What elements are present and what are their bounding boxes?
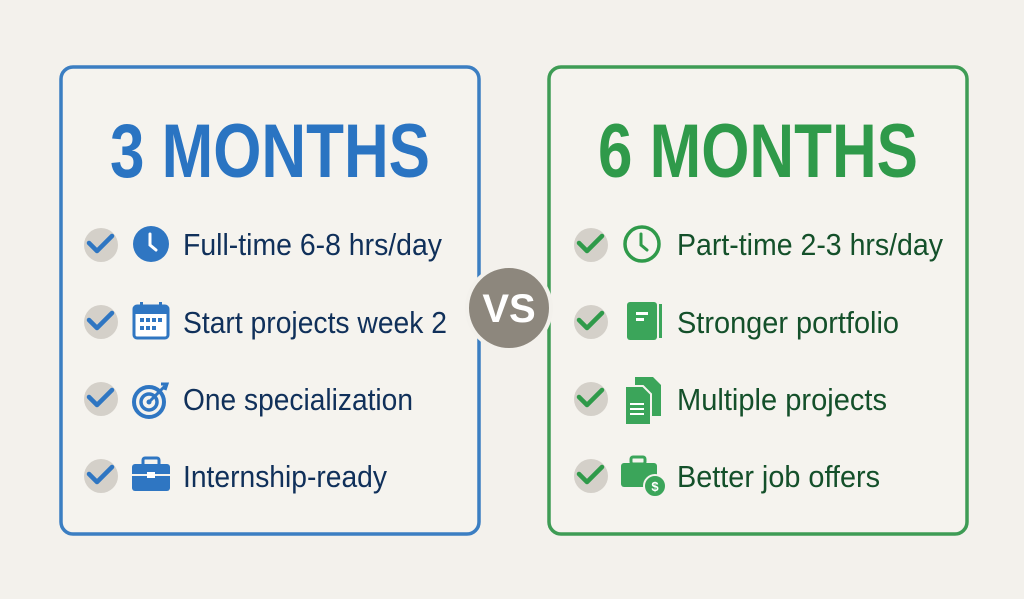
item: specialization: One specialization xyxy=(183,382,413,417)
item: part-time: Part-time 2-3 hrs/day xyxy=(677,227,943,262)
vs badge: VS xyxy=(482,287,536,331)
item: full-time: Full-time 6-8 hrs/day xyxy=(183,227,442,262)
item: portfolio xyxy=(574,302,899,340)
item: job offers xyxy=(574,457,880,497)
heading: 6 MONTHS: 6 MONTHS xyxy=(598,109,918,194)
item: job offers: Better job offers xyxy=(677,459,880,494)
item: start projects xyxy=(84,302,447,340)
item: internship xyxy=(84,458,387,494)
panel: 3 months xyxy=(61,67,479,534)
item: job offers: $ xyxy=(651,479,659,494)
item: full-time xyxy=(84,226,442,262)
item: multiple projects xyxy=(574,377,887,425)
heading: 3 MONTHS: 3 MONTHS xyxy=(110,109,430,194)
panel: 6 months xyxy=(549,67,967,534)
item: multiple projects: Multiple projects xyxy=(677,382,887,417)
item: part-time xyxy=(574,227,943,262)
item: specialization xyxy=(84,382,413,417)
item: start projects: Start projects week 2 xyxy=(183,305,447,340)
item: portfolio: Stronger portfolio xyxy=(677,305,899,340)
item: internship: Internship-ready xyxy=(183,459,387,494)
vs badge xyxy=(467,266,551,350)
